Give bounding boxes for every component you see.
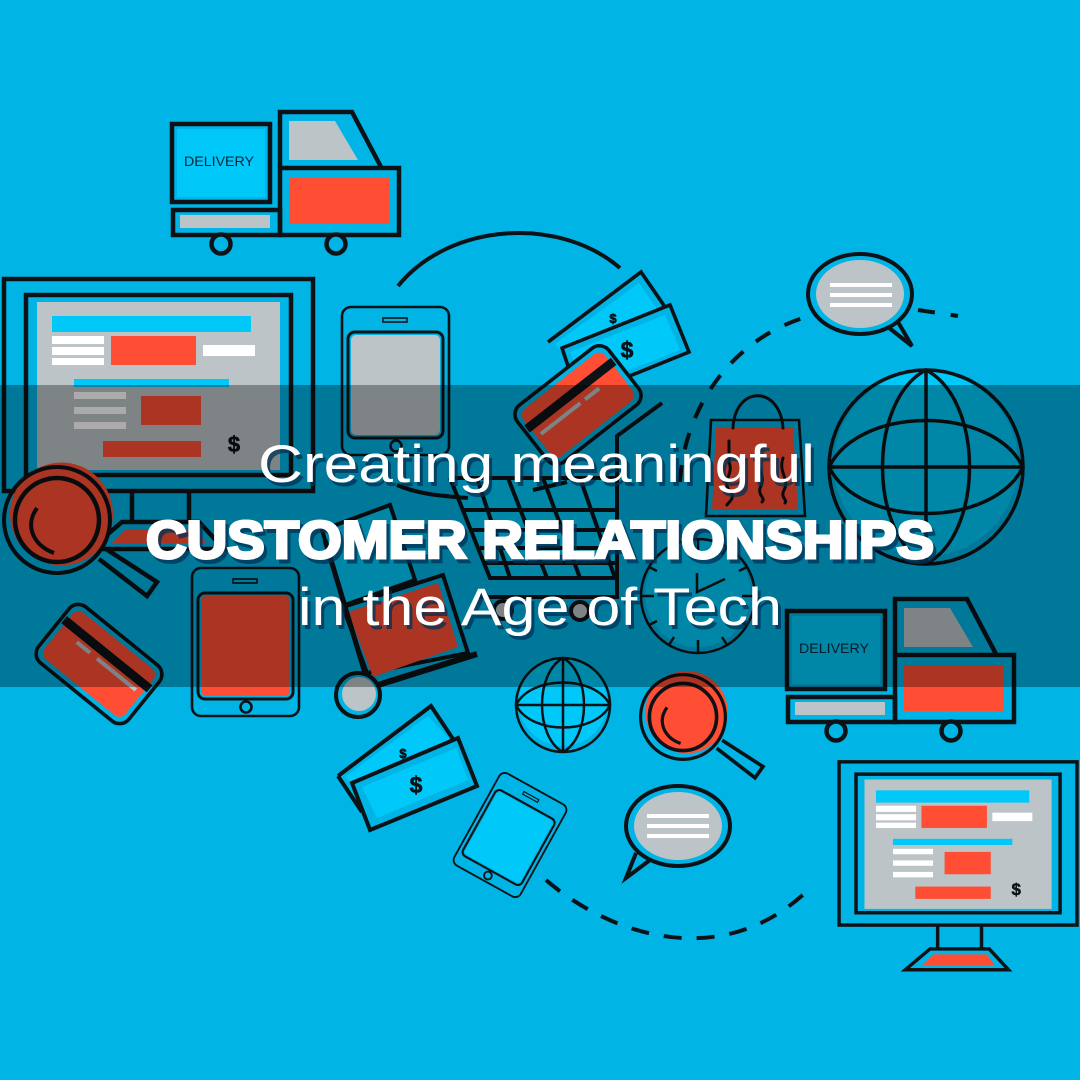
icon: credit card left (31, 600, 167, 728)
dashed connector: bottom (546, 880, 806, 938)
title line 1: Creating meaningful (258, 435, 815, 494)
icon: globe small (516, 658, 610, 752)
dark title band (0, 385, 1080, 687)
icon: magnifier center (641, 671, 763, 778)
icon: speech bubble bottom (626, 786, 730, 878)
icon: banknotes top: $ (609, 311, 617, 326)
title line 3: in the Age of Tech (298, 578, 782, 637)
connector arc: top (398, 233, 620, 286)
icon: monitor left (4, 279, 313, 549)
title line 2: CUSTOMER RELATIONSHIPS (146, 511, 934, 570)
icon: tablet top (342, 307, 449, 455)
icon: magnifier left (4, 462, 157, 596)
icon: banknotes bottom (338, 706, 477, 830)
icon: shopping bag (706, 396, 805, 516)
icon: banknotes bottom: $ (410, 772, 423, 798)
icon: speech bubble top (808, 254, 912, 346)
icon: banknotes top (548, 272, 689, 396)
icon: monitor bottom right (839, 762, 1077, 970)
icon: tablet bottom (451, 771, 569, 899)
icon: tablet left (192, 568, 299, 716)
icon: hand truck with parcels (322, 505, 477, 717)
icon: banknotes bottom: $ (399, 746, 407, 761)
icon: shopping cart (397, 403, 662, 620)
icon: delivery truck top (172, 112, 399, 254)
icon: delivery truck right (787, 599, 1014, 740)
icon: clock (641, 539, 755, 653)
icon: globe large (829, 370, 1023, 564)
icon: credit card top (510, 341, 646, 469)
title (146, 435, 934, 637)
icon: banknotes top: $ (621, 337, 634, 363)
dashed connector: top right (680, 310, 958, 482)
